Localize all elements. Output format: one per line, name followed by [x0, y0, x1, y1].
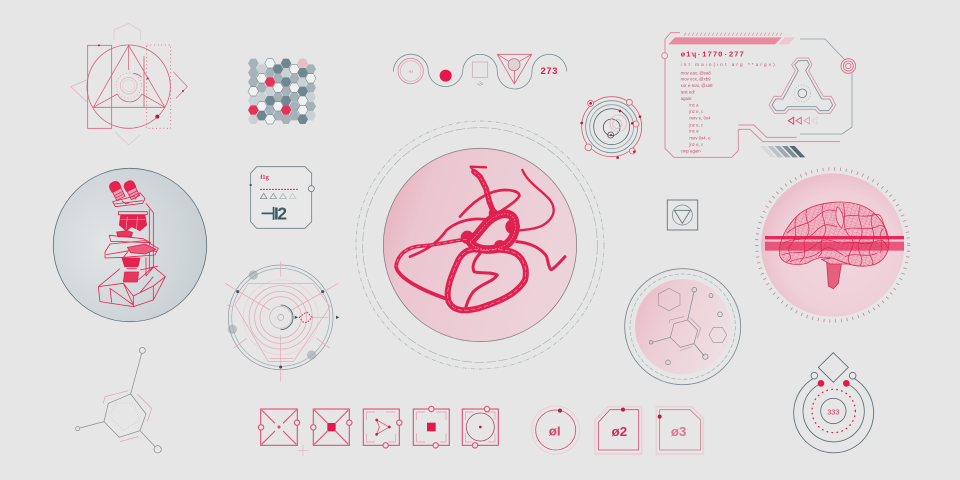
badge 03: ø3	[671, 424, 686, 439]
tick ring	[757, 169, 909, 321]
wave ribbon with icons: ‹II	[408, 69, 413, 75]
diamond ring gauge: 333	[827, 407, 839, 416]
numbered badges	[532, 406, 703, 454]
panel frame	[665, 33, 840, 157]
code listing: mov ecx, @xb9	[681, 77, 711, 82]
square icon 2	[311, 409, 352, 445]
frame connector node	[662, 53, 668, 59]
code listing: jnz e, c	[688, 122, 704, 127]
brain folds	[782, 203, 888, 266]
code listing: again:	[681, 96, 692, 101]
diamond ring gauge	[794, 353, 874, 453]
square icon 3	[363, 409, 402, 448]
badge 02: ø2	[612, 424, 627, 439]
small cross	[297, 445, 309, 456]
title band end	[778, 37, 795, 44]
scan bands	[765, 236, 904, 239]
radar diagram	[225, 262, 339, 382]
filament organism	[396, 167, 565, 312]
microscope disc	[53, 168, 207, 322]
panel: central specimen	[356, 121, 604, 369]
panel title: ø1ʮ·1770·277	[681, 51, 744, 59]
badge 02	[595, 407, 642, 454]
brain stem	[822, 257, 855, 289]
code listing: mov eax, @xa8	[681, 70, 711, 75]
file widget	[249, 167, 314, 228]
square icon 4	[413, 406, 449, 448]
wave ribbon with icons	[393, 54, 567, 89]
wave ribbon with icons: ‹3›	[477, 81, 484, 87]
specimen disc	[383, 148, 577, 342]
badge 03	[656, 407, 703, 454]
file widget: f1g	[260, 174, 270, 181]
target circle	[841, 59, 856, 73]
file widget: ⊣I2	[260, 204, 287, 224]
orbital diagram	[580, 97, 642, 159]
title band	[668, 37, 782, 44]
panel: petri dish	[625, 269, 741, 385]
badge 01: øI	[549, 424, 561, 439]
code listing: mov e, 0x4	[689, 116, 711, 121]
square icon 1	[258, 409, 300, 445]
code listing: inc a	[689, 103, 699, 108]
code listing: int main(int arg **argv)	[681, 62, 775, 67]
stripe block	[760, 146, 805, 157]
outer rings	[356, 121, 604, 369]
filament texture	[396, 172, 526, 310]
small triangles row	[788, 117, 817, 124]
code listing: xor e-mai, @xa8	[681, 83, 713, 88]
benzene molecule	[76, 347, 161, 453]
wave ribbon with icons: 273	[541, 66, 558, 76]
triangular badge	[769, 58, 836, 113]
brain hemispheres	[779, 202, 889, 266]
geometric construction diagram	[71, 23, 187, 145]
microscope drawing	[98, 179, 165, 307]
brain disc	[761, 173, 904, 317]
panel: brain	[757, 169, 909, 321]
scan band lower	[765, 242, 904, 251]
hatch strip	[684, 33, 782, 36]
code panel	[662, 33, 856, 157]
code listing: test edi	[681, 90, 695, 95]
frame: triangle icon	[667, 200, 698, 230]
code listing: jnz e, c	[688, 142, 704, 147]
code listing	[681, 62, 775, 153]
badge 01	[532, 406, 580, 454]
code listing: mov 0x4, e	[689, 135, 711, 140]
code listing: cmp again	[681, 148, 701, 153]
square icon 5	[462, 406, 498, 448]
code listing: inc a	[689, 129, 699, 134]
hexagon grid	[248, 59, 316, 124]
code listing: jnz e, c	[688, 109, 704, 114]
brain fissure	[836, 207, 843, 228]
square icon row	[258, 406, 498, 456]
upper right frame lines	[800, 39, 852, 134]
